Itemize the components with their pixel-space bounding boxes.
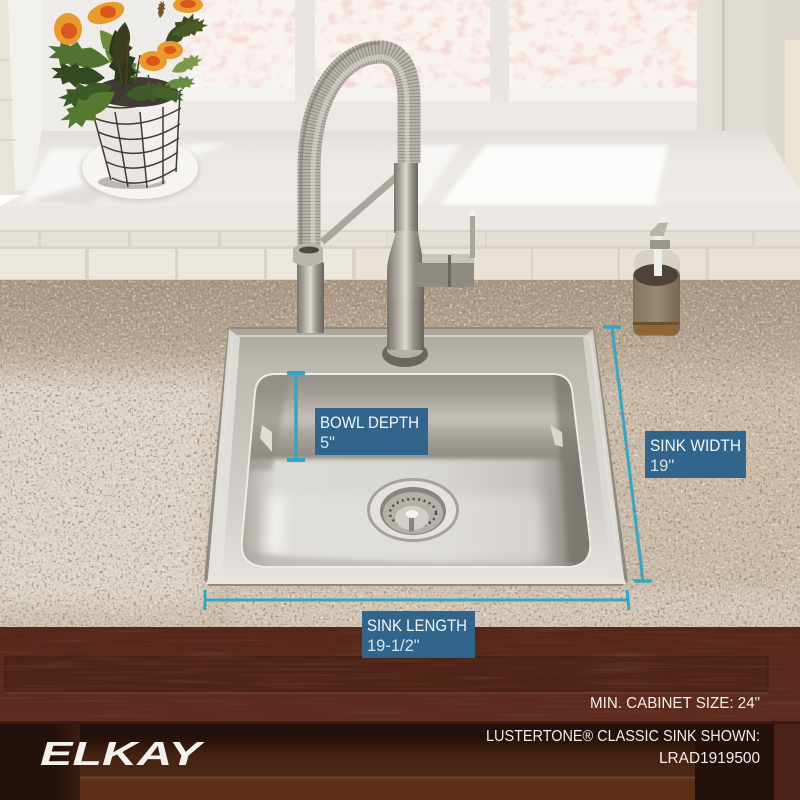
window glass panes: [183, 0, 698, 103]
faucet: [293, 43, 475, 367]
caption: model shown: LRAD1919500: [659, 750, 760, 767]
caption: model shown: [486, 728, 760, 767]
window and wall: [0, 0, 800, 195]
drain: [367, 478, 459, 542]
faucet handle: [414, 210, 475, 287]
label: bowl depth: BOWL DEPTH: [320, 414, 419, 432]
cabinet: [0, 627, 800, 800]
soap dispenser: [633, 215, 680, 336]
saucer: [80, 137, 200, 202]
caption: model shown: LUSTERTONE® CLASSIC SINK SHOWN:: [486, 728, 760, 745]
caption: minimum cabinet size: MIN. CABINET SIZE: 24": [590, 695, 760, 712]
sink: [204, 327, 628, 586]
plant leaves: [44, 0, 210, 136]
label: bowl depth: [315, 408, 428, 455]
label: sink width: [645, 431, 746, 478]
window frame: [0, 0, 800, 195]
plant pot: [89, 75, 183, 189]
pot wire grid: [90, 90, 182, 188]
faucet spring hose: [301, 43, 409, 250]
label: sink width: 19": [650, 457, 674, 475]
logo: Elkay: ELKAY: [40, 735, 205, 772]
dimension: sink width: [603, 327, 746, 581]
label: bowl depth: 5": [320, 434, 335, 452]
label: sink length: SINK LENGTH: [367, 617, 467, 635]
countertop: [0, 280, 800, 628]
plant flowers: [54, 0, 203, 71]
faucet diagonal link: [322, 172, 402, 242]
dimension: sink length: [205, 590, 629, 658]
label: sink width: SINK WIDTH: [650, 437, 741, 455]
sink bowl: [236, 370, 600, 572]
cabinet recessed panel: [5, 657, 768, 693]
label: sink length: 19-1/2": [367, 637, 420, 655]
label: sink length: [362, 611, 475, 658]
potted plant: [44, 0, 210, 202]
cabinet lower opening: [0, 724, 800, 800]
dimension: bowl depth: [287, 373, 428, 460]
faucet body: [382, 163, 428, 367]
sink rim: [204, 327, 628, 586]
faucet left post: [293, 243, 324, 333]
window sill: [0, 131, 800, 230]
backsplash tiles: [0, 230, 800, 281]
